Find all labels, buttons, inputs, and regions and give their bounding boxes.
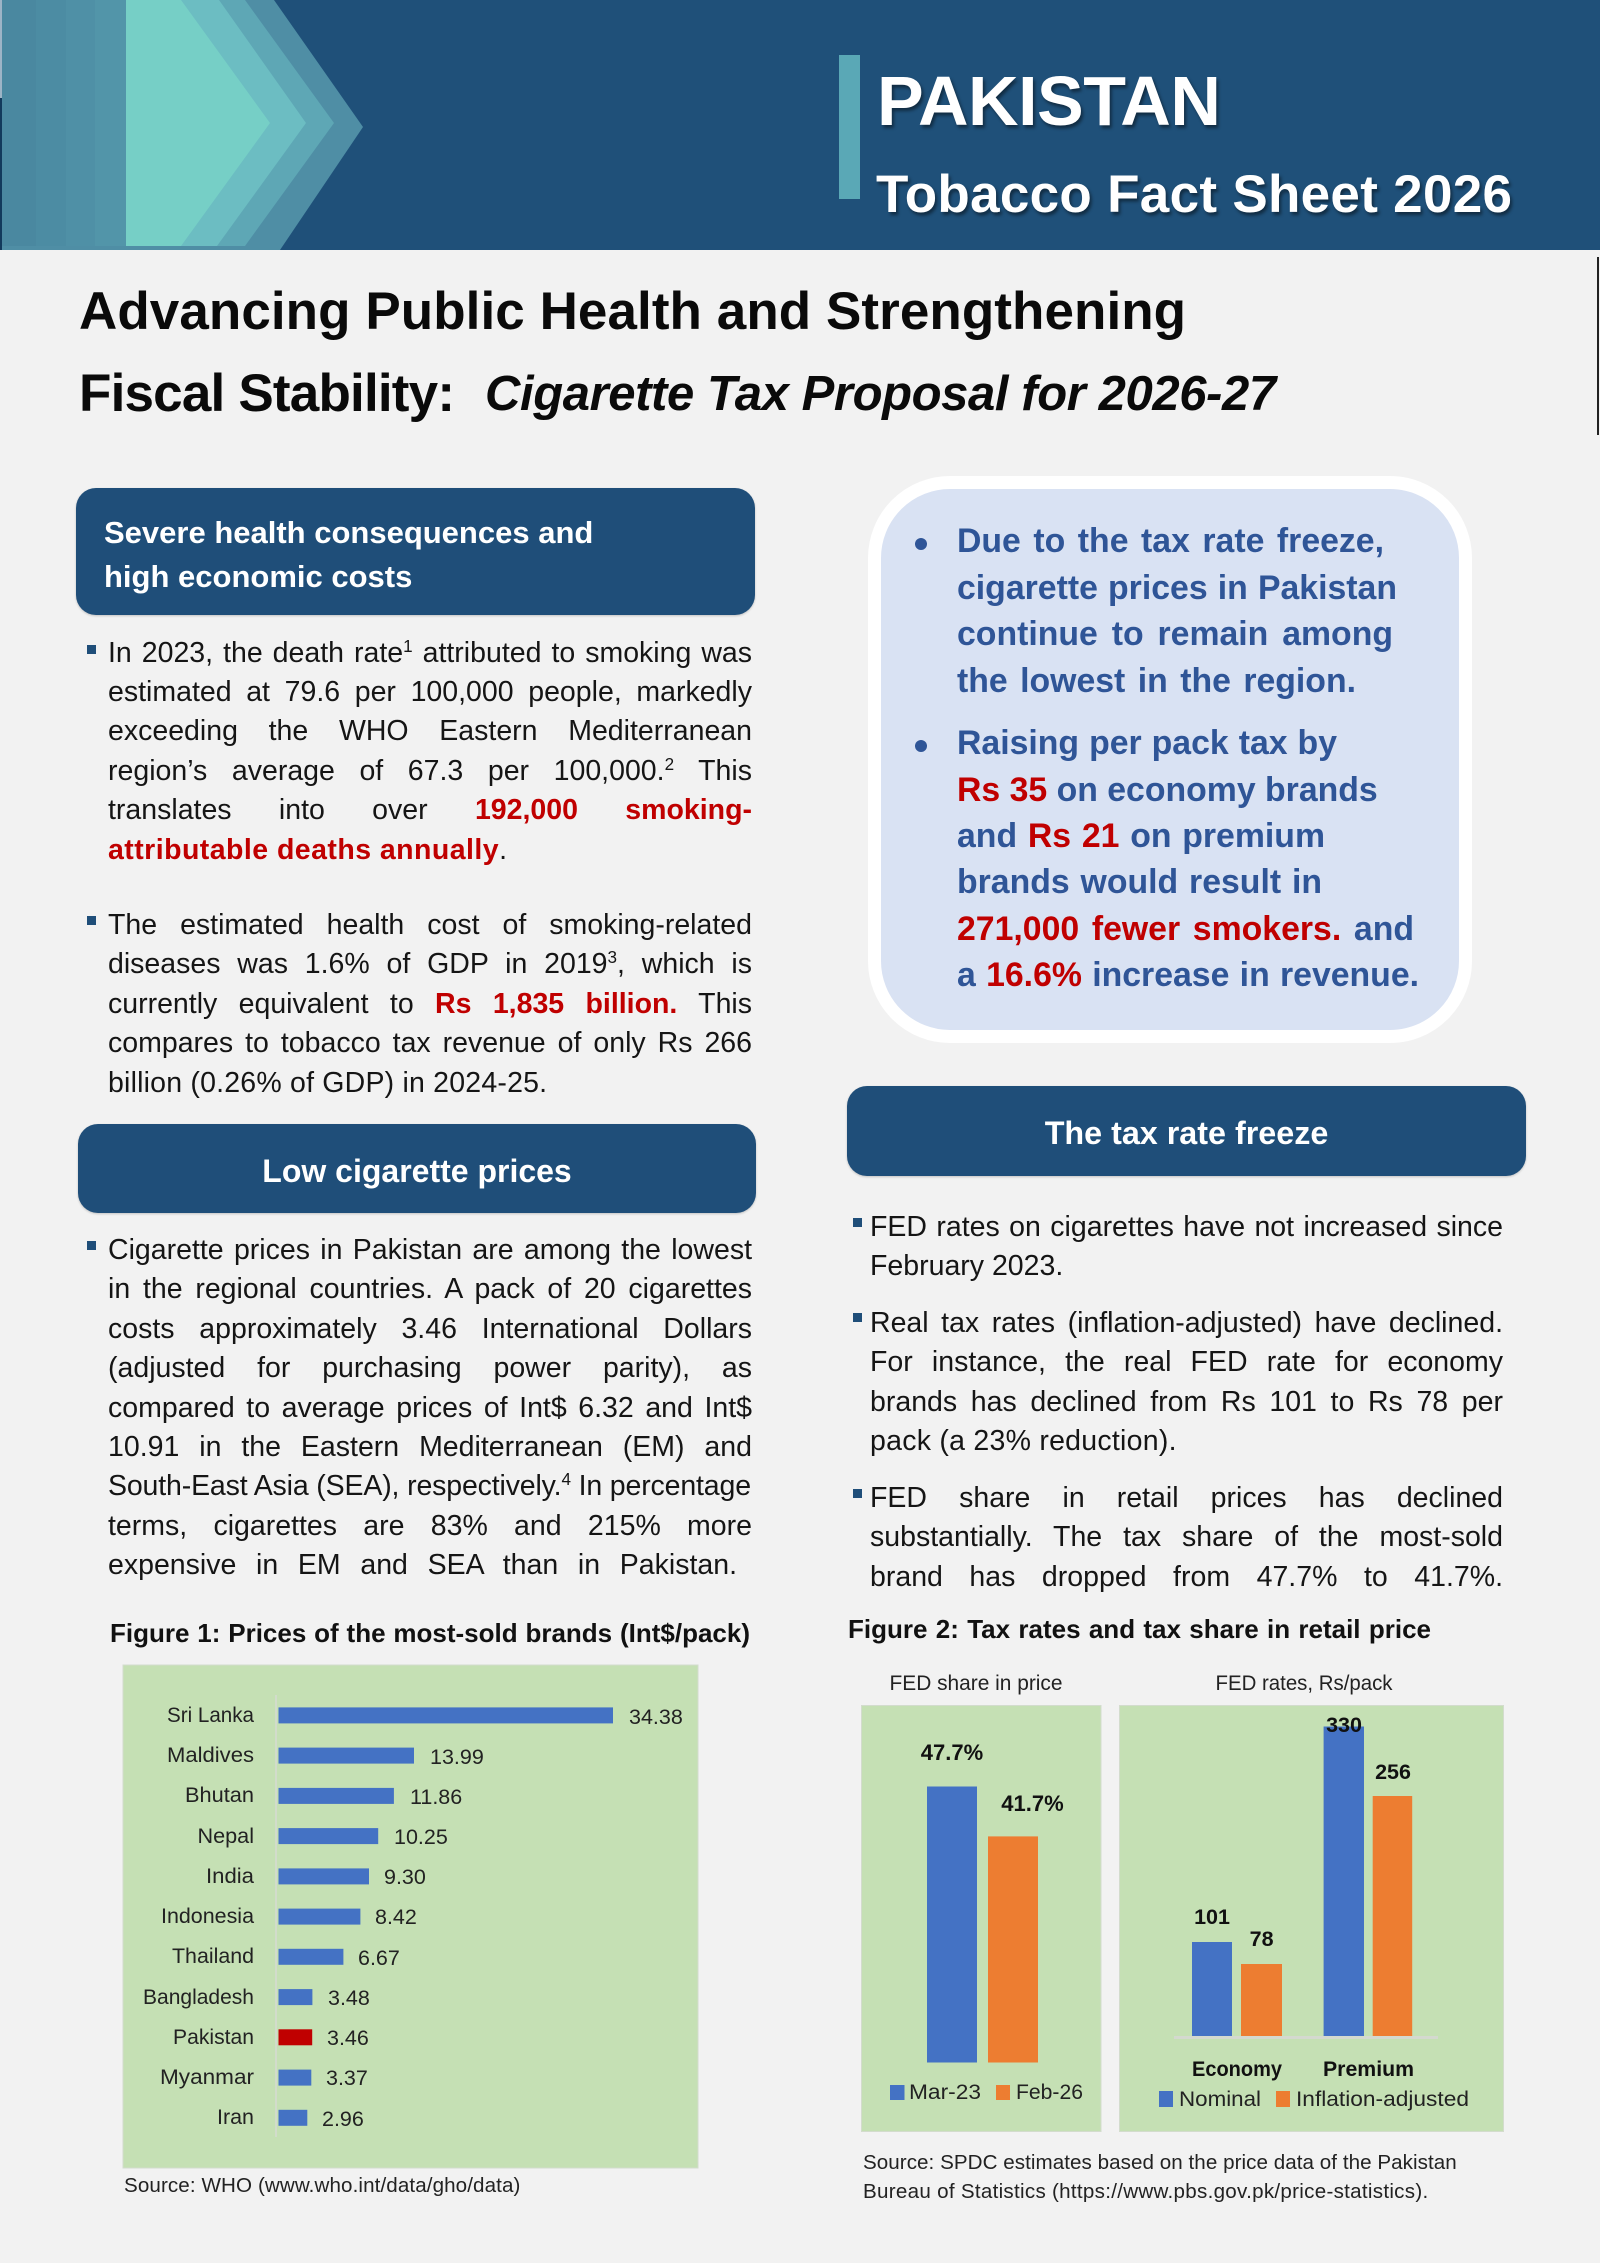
value labels: 2.96 <box>322 2107 364 2131</box>
paragraph: cigarette prices: Cigarette prices in Pakistan are among the lowest <box>108 1234 752 1266</box>
paragraph: cigarette prices: costs approximately 3.46 International Dollars <box>108 1313 752 1345</box>
message 1: Due to the tax rate freeze, <box>957 522 1384 560</box>
value labels: 330 <box>1326 1713 1362 1737</box>
paragraph: cigarette prices: terms, cigarettes are 83% and 215% more <box>108 1510 752 1542</box>
paragraph: health cost <box>108 909 752 1099</box>
chart: FED share in price <box>861 1672 1102 2132</box>
value labels: 13.99 <box>430 1745 484 1769</box>
paragraph: FED share: FED share in retail prices has declined <box>870 1482 1503 1514</box>
bars <box>927 1786 1038 2062</box>
bars <box>1192 1726 1412 2036</box>
section header: low cigarette prices: Low cigarette prices <box>262 1153 572 1189</box>
category labels: Economy <box>1192 2058 1282 2081</box>
message 2: 271,000 fewer smokers. and <box>957 910 1414 948</box>
message 1 <box>957 522 1397 700</box>
section header: severe health consequences <box>76 488 755 615</box>
message 2: Rs 35 on economy brands <box>957 771 1378 809</box>
paragraph: FED share: substantially. The tax share of the most-sold <box>870 1521 1503 1553</box>
country labels: Nepal <box>198 1825 254 1848</box>
value labels: 256 <box>1375 1760 1411 1784</box>
paragraph: death rate: estimated at 79.6 per 100,000 people, markedly <box>108 676 752 708</box>
value labels: 3.46 <box>327 2026 369 2050</box>
paragraph: death rate: attributable deaths annually. <box>108 834 507 866</box>
value labels: 8.42 <box>375 1905 417 1929</box>
legend: Inflation-adjusted <box>1296 2088 1469 2111</box>
message 1: continue to remain among <box>957 615 1393 653</box>
paragraph: FED share: brand has dropped from 47.7% to 41.7%. <box>870 1561 1503 1593</box>
source: figure 2: Source: SPDC estimates based on the price data of the Pakistan <box>863 2151 1457 2174</box>
section header: severe health consequences: Severe health consequences and <box>104 515 593 550</box>
paragraph: health cost: currently equivalent to Rs 1,835 billion. This <box>108 988 752 1020</box>
section header: tax rate freeze <box>847 1086 1526 1176</box>
country labels: Sri Lanka <box>167 1704 254 1727</box>
callout: key messages <box>868 476 1472 1043</box>
category labels: Premium <box>1323 2058 1414 2081</box>
value labels: 9.30 <box>384 1865 426 1889</box>
message 1: cigarette prices in Pakistan <box>957 569 1397 607</box>
main heading: Advancing Public Health and Strengthening <box>79 282 1186 341</box>
section header: tax rate freeze: The tax rate freeze <box>1045 1115 1328 1151</box>
paragraph: rates not increased: FED rates on cigarettes have not increased since <box>870 1211 1503 1243</box>
source: figure 1: Source: WHO (www.who.int/data/gho/data) <box>124 2174 520 2197</box>
value labels: 3.48 <box>328 1986 370 2010</box>
accent bar <box>839 55 860 199</box>
paragraph: death rate: In 2023, the death rate1 attributed to smoking was <box>108 636 752 668</box>
chart title: FED share in price <box>890 1672 1062 1695</box>
value labels <box>322 1705 683 2131</box>
figure 2 title: Figure 2: Tax rates and tax share in retail price <box>848 1614 1431 1644</box>
paragraph: death rate: translates into over 192,000 smoking- <box>108 794 752 826</box>
paragraph: health cost: The estimated health cost of smoking-related <box>108 909 752 941</box>
country labels: India <box>206 1865 254 1888</box>
chevron graphic <box>0 0 363 250</box>
paragraph: death rate: exceeding the WHO Eastern Mediterranean <box>108 715 752 747</box>
bar chart: cigarette prices by country <box>122 1664 698 2168</box>
bullet marker <box>853 1218 862 1227</box>
category labels <box>1192 2058 1414 2081</box>
legend: Mar-23 <box>909 2081 981 2104</box>
country labels: Bhutan <box>185 1784 254 1807</box>
message 1: the lowest in the region. <box>957 662 1356 700</box>
source: figure 2 <box>863 2151 1457 2203</box>
paragraph: real tax rates <box>870 1307 1503 1457</box>
message 2: and Rs 21 on premium <box>957 817 1325 855</box>
source: figure 2: Bureau of Statistics (https://www.pbs.gov.pk/price-statistics). <box>863 2180 1428 2203</box>
paragraph: health cost: compares to tobacco tax revenue of only Rs 266 <box>108 1027 752 1059</box>
value labels: 41.7% <box>1001 1791 1064 1816</box>
paragraph: cigarette prices: South-East Asia (SEA), respectively.4 In percentage <box>108 1470 751 1502</box>
section header: severe health consequences: high economic costs <box>104 559 412 594</box>
paragraph: rates not increased <box>870 1211 1503 1282</box>
legend <box>1159 2088 1469 2111</box>
legend: Nominal <box>1179 2088 1261 2111</box>
paragraph: cigarette prices <box>108 1234 752 1581</box>
value labels: 11.86 <box>410 1785 462 1809</box>
country labels: Thailand <box>172 1945 254 1968</box>
paragraph: cigarette prices: 10.91 in the Eastern Mediterranean (EM) and <box>108 1431 752 1463</box>
paragraph: cigarette prices: in the regional countries. A pack of 20 cigarettes <box>108 1273 752 1305</box>
paragraph: health cost: billion (0.26% of GDP) in 2024-25. <box>108 1067 547 1099</box>
value labels: 78 <box>1250 1927 1274 1951</box>
bullet marker <box>87 916 96 925</box>
paragraph: death rate <box>108 636 752 866</box>
title: fact sheet: Tobacco Fact Sheet 2026 <box>876 165 1512 224</box>
value labels: 101 <box>1194 1905 1230 1929</box>
paragraph: real tax rates: pack (a 23% reduction). <box>870 1425 1177 1457</box>
bullet dot <box>915 740 927 752</box>
main heading <box>79 282 1278 423</box>
paragraph: death rate: region’s average of 67.3 per 100,000.2 This <box>108 755 752 787</box>
paragraph: FED share <box>870 1482 1503 1593</box>
chart: FED rates per pack <box>1119 1672 1504 2132</box>
message 2: Raising per pack tax by <box>957 724 1337 762</box>
country labels: Iran <box>217 2106 254 2129</box>
country labels: Myanmar <box>160 2066 254 2089</box>
section header: low cigarette prices <box>78 1124 756 1213</box>
bullet marker <box>853 1489 862 1498</box>
legend <box>890 2081 1083 2104</box>
legend: Feb-26 <box>1016 2081 1083 2104</box>
paragraph: real tax rates: Real tax rates (inflation-adjusted) have declined. <box>870 1307 1503 1339</box>
bullet marker <box>87 1241 96 1250</box>
value labels: 47.7% <box>921 1740 983 1765</box>
value labels <box>1194 1713 1411 1951</box>
value labels: 6.67 <box>358 1946 400 1970</box>
country labels: Maldives <box>167 1744 254 1767</box>
message 2: brands would result in <box>957 863 1322 901</box>
country labels: Bangladesh <box>143 1986 254 2009</box>
right edge line <box>1597 257 1599 435</box>
message 2 <box>957 724 1419 994</box>
header banner <box>0 0 1600 250</box>
value labels <box>921 1740 1064 1816</box>
message 2: a 16.6% increase in revenue. <box>957 956 1419 994</box>
bars <box>278 1707 613 2126</box>
paragraph: cigarette prices: compared to average prices of Int$ 6.32 and Int$ <box>108 1392 752 1424</box>
country labels: Indonesia <box>161 1905 254 1928</box>
bullet dot <box>915 538 927 550</box>
bullet marker <box>87 645 96 654</box>
bullet marker <box>853 1313 862 1322</box>
title: country: PAKISTAN <box>877 62 1220 140</box>
paragraph: real tax rates: brands has declined from Rs 101 to Rs 78 per <box>870 1386 1503 1418</box>
country labels: Pakistan <box>173 2026 254 2049</box>
main heading: Fiscal Stability: <box>79 364 454 423</box>
value labels: 3.37 <box>326 2066 368 2090</box>
paragraph: rates not increased: February 2023. <box>870 1250 1063 1282</box>
figure 1 title: Figure 1: Prices of the most-sold brands (Int$/pack) <box>110 1618 750 1648</box>
paragraph: real tax rates: For instance, the real FED rate for economy <box>870 1346 1503 1378</box>
value labels: 34.38 <box>629 1705 683 1729</box>
value labels: 10.25 <box>394 1825 448 1849</box>
paragraph: cigarette prices: (adjusted for purchasing power parity), as <box>108 1352 752 1384</box>
country labels <box>143 1704 254 2129</box>
chart title: FED rates, Rs/pack <box>1216 1672 1393 1695</box>
paragraph: cigarette prices: expensive in EM and SEA than in Pakistan. <box>108 1549 737 1581</box>
heading italic part: Cigarette Tax Proposal for 2026-27 <box>485 367 1276 421</box>
paragraph: health cost: diseases was 1.6% of GDP in 20193, which is <box>108 948 752 980</box>
